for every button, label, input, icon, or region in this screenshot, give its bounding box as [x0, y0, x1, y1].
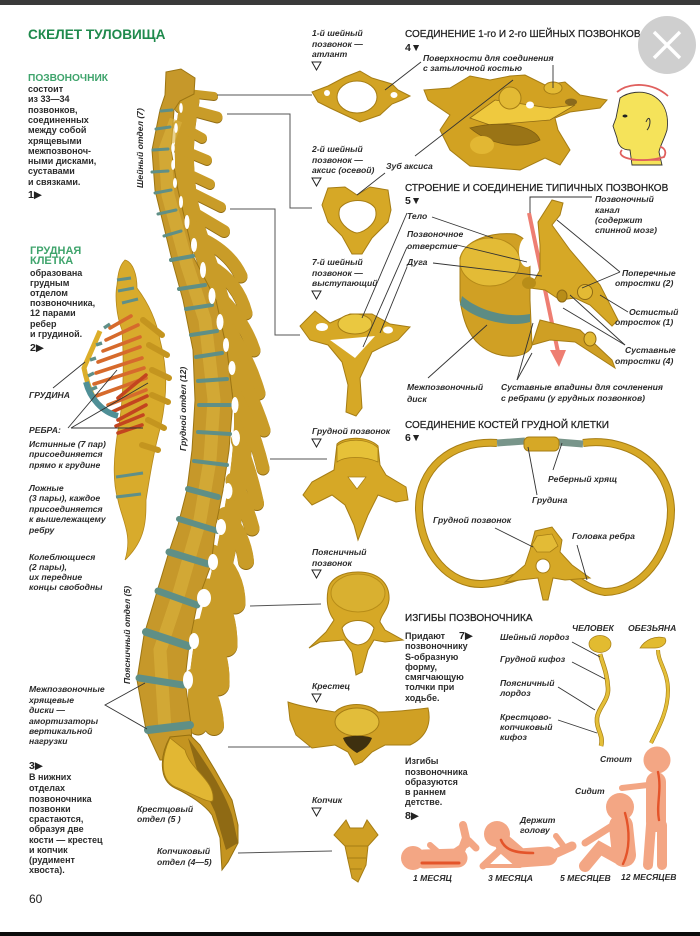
spine curve labels: копчиковый	[500, 722, 553, 732]
text block: intervertebral discs	[28, 683, 147, 746]
text block: fused vertebrae: образуя две	[29, 824, 84, 834]
text block: rib cage description	[30, 245, 95, 354]
vertebra labels column: Копчик	[312, 795, 343, 805]
rib cage section labels: Реберный хрящ	[548, 474, 617, 484]
icon: coccyx	[334, 820, 378, 882]
text block: curves form in early childhood	[405, 756, 469, 822]
icon: sacrum	[288, 702, 429, 765]
spine section labels: Копчиковый	[157, 846, 211, 856]
heading 5: СТРОЕНИЕ И СОЕДИНЕНИЕ ТИПИЧНЫХ ПОЗВОНКОВ	[405, 183, 669, 194]
vertebra labels column: 7-й шейный	[312, 257, 363, 267]
text block: spine description: 1▶	[28, 189, 43, 201]
text block: intervertebral discs: диски —	[29, 705, 65, 715]
typical vertebrae labels: (содержит	[595, 215, 643, 225]
illustration: rib cage cross section	[419, 437, 671, 600]
text block: rib cage description: 2▶	[30, 342, 45, 354]
typical vertebrae labels: с ребрами (у грудных позвонков)	[501, 393, 645, 403]
heading 6	[405, 418, 609, 444]
spine curve labels: ЧЕЛОВЕК	[572, 623, 614, 633]
text block: fused vertebrae: В нижних	[29, 772, 71, 782]
spine curve labels: Грудной кифоз	[500, 654, 566, 664]
text block: rib cage description: КЛЕТКА	[30, 255, 73, 267]
illustration: baby at 1 month	[401, 825, 476, 870]
leader lines: typical vertebrae	[362, 197, 628, 380]
text block: spine description: хрящевыми	[28, 136, 82, 146]
joint labels: Поверхности для соединения	[423, 53, 554, 63]
text block: fused vertebrae: срастаются,	[29, 814, 83, 824]
rib cage section labels: Грудной позвонок	[433, 515, 512, 525]
text block: rib types: к вышележащему	[29, 514, 107, 524]
title: СКЕЛЕТ ТУЛОВИЩА	[28, 27, 166, 42]
text block: fused vertebrae: и копчик	[29, 845, 68, 855]
text block: spine description: суставами	[28, 166, 75, 176]
leader lines: rib cage section	[495, 443, 587, 580]
spine curve labels: ОБЕЗЬЯНА	[628, 623, 676, 633]
text block: rib types: присоединяется	[29, 504, 103, 514]
text block: spine description: межпозвоноч-	[28, 146, 91, 156]
text block: fused vertebrae: (рудимент	[29, 855, 76, 865]
vertebra labels column: Поясничный	[312, 547, 367, 557]
baby stage labels: Стоит	[600, 754, 632, 764]
illustration: baby at 5 months	[585, 793, 634, 866]
spine section labels: Крестцовый	[137, 804, 194, 814]
vertebra labels column: Грудной позвонок	[312, 426, 391, 436]
heading 6: СОЕДИНЕНИЕ КОСТЕЙ ГРУДНОЙ КЛЕТКИ	[405, 418, 609, 431]
typical vertebrae labels: Межпозвоночный	[407, 382, 484, 392]
text block: rib types: (2 пары),	[29, 562, 67, 572]
spine curve labels: лордоз	[499, 688, 531, 698]
baby stage labels: голову	[520, 825, 551, 835]
intervertebral discs	[139, 110, 230, 730]
text block: curves form in early childhood: 8▶	[405, 810, 420, 822]
spine curve labels	[499, 623, 676, 742]
text block: curves form in early childhood: образуются	[405, 777, 458, 787]
heading 4: 4▼	[405, 42, 421, 54]
joint labels: с затылочной костью	[423, 63, 523, 73]
illustration: rib cage side view	[84, 260, 169, 560]
text block: curves form in early childhood: детстве.	[405, 797, 442, 807]
chart: human spine curve	[589, 636, 611, 746]
icon: seventh cervical vertebra	[300, 311, 410, 416]
sacrum and coccyx	[162, 735, 238, 870]
typical vertebrae labels: Позвоночный	[595, 194, 655, 204]
typical vertebrae labels	[406, 194, 679, 404]
text block: rib cage description: и грудиной.	[30, 329, 82, 339]
text block: rib types: Истинные (7 пар)	[29, 439, 106, 449]
baby stage labels	[413, 754, 677, 883]
processes of the vertebrae	[178, 92, 264, 725]
rib cage section labels: Грудина	[532, 495, 568, 505]
text block: intervertebral discs: вертикальной	[29, 726, 93, 736]
vertebra labels column	[311, 28, 391, 816]
heading 6: 6▼	[405, 432, 421, 444]
text block: rib types: Колеблющиеся	[29, 552, 95, 562]
spine section labels: Грудной отдел (12)	[178, 367, 188, 451]
vertebra labels column: Крестец	[312, 681, 351, 691]
text block: S-curve purpose: форму,	[405, 662, 437, 672]
vertebra labels column: позвонок —	[312, 268, 363, 278]
text block: S-curve purpose	[405, 630, 474, 703]
typical vertebrae labels: канал	[595, 205, 620, 215]
typical vertebrae labels: отростки (4)	[615, 356, 673, 366]
text block: S-curve purpose: позвоночнику	[405, 641, 468, 651]
vertebra labels column: позвонок —	[312, 39, 363, 49]
typical vertebrae labels: Поперечные	[622, 268, 676, 278]
text block: rib cage description: позвоночника,	[30, 298, 95, 308]
icon: atlas vertebra	[312, 71, 410, 122]
baby stage labels: Держит	[519, 815, 556, 825]
heading 4: СОЕДИНЕНИЕ 1-го И 2-го ШЕЙНЫХ ПОЗВОНКОВ	[405, 27, 641, 40]
text block: intervertebral discs: Межпозвоночные	[29, 684, 105, 694]
text block: spine description	[28, 73, 109, 201]
text block: rib types: РЕБРА:	[29, 425, 61, 435]
intervertebral foramina	[171, 103, 240, 689]
text block: spine description: ПОЗВОНОЧНИК	[28, 73, 109, 84]
heading 5: 5▼	[405, 195, 421, 207]
text block: rib cage description: ГРУДНАЯ	[30, 245, 81, 257]
icon: axis vertebra	[322, 187, 391, 254]
baby stage labels: 1 МЕСЯЦ	[413, 873, 453, 883]
typical vertebrae labels: диск	[407, 394, 427, 404]
baby stage labels: 3 МЕСЯЦА	[488, 873, 533, 883]
spine section labels	[122, 108, 212, 867]
vertebra labels column: 2-й шейный	[311, 144, 363, 154]
text block: fused vertebrae: 3▶	[29, 760, 44, 772]
text block: S-curve purpose: толчки при	[405, 682, 454, 692]
text block: fused vertebrae: отделах	[29, 783, 65, 793]
text block: rib cage description: ребер	[30, 319, 57, 329]
icon: thoracic vertebra	[303, 438, 408, 540]
text block: S-curve purpose: Придают	[405, 631, 446, 641]
text block: S-curve purpose: смягчающую	[405, 672, 464, 682]
vertebral bodies	[137, 69, 233, 760]
illustration: baby at 3 months	[483, 821, 572, 866]
text block: curves form in early childhood: позвоночника	[405, 767, 469, 777]
heading 5	[405, 183, 669, 207]
baby stage labels: 5 МЕСЯЦЕВ	[560, 873, 611, 883]
typical vertebrae labels: отросток (1)	[615, 317, 673, 327]
heading 4	[405, 27, 641, 54]
spine section labels: Шейный отдел (7)	[135, 108, 145, 188]
leader lines: rib cage	[53, 362, 148, 428]
text block: S-curve purpose: S-образную	[405, 652, 459, 662]
chart: monkey spine curve	[640, 637, 668, 743]
page number: 60	[29, 892, 43, 906]
text block: curves form in early childhood: в раннем	[405, 787, 446, 797]
text block: S-curve purpose: ходьбе.	[405, 693, 439, 703]
text block: spine description: состоит	[28, 84, 64, 94]
typical vertebrae labels: отростки (2)	[615, 278, 673, 288]
rib cage section labels: Головка ребра	[572, 531, 635, 541]
joint labels: Зуб аксиса	[386, 161, 433, 171]
typical vertebrae labels: отверстие	[407, 241, 458, 251]
typical vertebrae labels: Тело	[407, 211, 427, 221]
text block: intervertebral discs: амортизаторы	[29, 716, 99, 726]
text block: rib types	[28, 390, 107, 592]
vertebra labels column: позвонок —	[312, 155, 363, 165]
text block: spine description: и связками.	[28, 177, 80, 187]
vertebra labels column: атлант	[312, 49, 348, 59]
typical vertebrae labels: Позвоночное	[407, 229, 464, 239]
rib cage section labels	[433, 474, 635, 541]
typical vertebrae labels: Суставные впадины для сочленения	[501, 382, 663, 392]
typical vertebrae labels: Остистый	[629, 307, 679, 317]
text block: spine description: позвонков,	[28, 105, 78, 115]
baby stage labels: Сидит	[575, 786, 605, 796]
spine section labels: отдел (5 )	[137, 814, 181, 824]
vertebra labels column: позвонок	[312, 558, 353, 568]
leader lines: joint	[357, 62, 553, 195]
typical vertebrae labels: Суставные	[625, 345, 676, 355]
text block: spine description: из 33—34	[28, 94, 70, 104]
text block: intervertebral discs: хрящевые	[28, 695, 74, 705]
illustration: typical vertebrae	[460, 200, 618, 368]
text block: rib types: присоединяется	[29, 449, 103, 459]
text block: fused vertebrae: позвоночника	[29, 794, 93, 804]
text block: rib cage description: грудным	[30, 278, 70, 288]
spine section labels: отдел (4—5)	[157, 857, 212, 867]
heading 7: spine curves: ИЗГИБЫ ПОЗВОНОЧНИКА	[405, 613, 533, 624]
baby stage labels: 12 МЕСЯЦЕВ	[621, 872, 677, 882]
text block: rib types: их передние	[29, 572, 82, 582]
text block: intervertebral discs: нагрузки	[29, 736, 68, 746]
close button	[638, 16, 696, 74]
spine section labels: Поясничный отдел (5)	[122, 586, 132, 684]
illustration: baby at 12 months	[622, 746, 670, 865]
joint labels	[386, 53, 554, 171]
text block: rib types: ГРУДИНА	[29, 390, 70, 400]
illustration: main spinal column	[137, 69, 264, 870]
text block: fused vertebrae: кости — крестец	[29, 835, 103, 845]
text block: rib types: прямо к грудине	[29, 460, 100, 470]
text block: rib types: концы свободны	[29, 582, 103, 592]
text block: rib cage description: 12 парами	[30, 308, 76, 318]
text block: rib cage description: образована	[30, 268, 83, 278]
connector lines: spine to vertebrae	[217, 95, 332, 853]
text block: fused vertebrae	[29, 760, 103, 875]
vertebra labels column: выступающий	[312, 278, 378, 288]
text block: curves form in early childhood: Изгибы	[405, 756, 439, 766]
spine curve labels: кифоз	[500, 732, 527, 742]
text block: fused vertebrae: хвоста).	[29, 865, 65, 875]
text block: rib cage description: отделом	[30, 288, 68, 298]
text block: rib types: Ложные	[28, 483, 64, 493]
text block: rib types: ребру	[28, 525, 55, 535]
text block: spine description: ными дисками,	[28, 156, 96, 166]
spine curve labels: Шейный лордоз	[500, 632, 570, 642]
text block: spine description: между собой	[28, 125, 86, 135]
text block: S-curve purpose: 7▶	[459, 630, 474, 642]
text block: spine description: соединенных	[28, 115, 89, 125]
typical vertebrae labels: Дуга	[406, 257, 428, 267]
icon: head turning diagram	[613, 85, 668, 165]
vertebra labels column: аксис (осевой)	[312, 165, 374, 175]
spine curve labels: Крестцово-	[500, 712, 552, 722]
icon: lumbar vertebra	[309, 572, 403, 675]
vertebra labels column: 1-й шейный	[312, 28, 363, 38]
illustration: joint of first and second cervical vertebrae	[424, 75, 607, 170]
spine curve labels: Поясничный	[500, 678, 555, 688]
text block: fused vertebrae: позвонки	[29, 804, 71, 814]
typical vertebrae labels: спинной мозг)	[595, 225, 657, 235]
text block: rib types: (3 пары), каждое	[29, 493, 100, 503]
